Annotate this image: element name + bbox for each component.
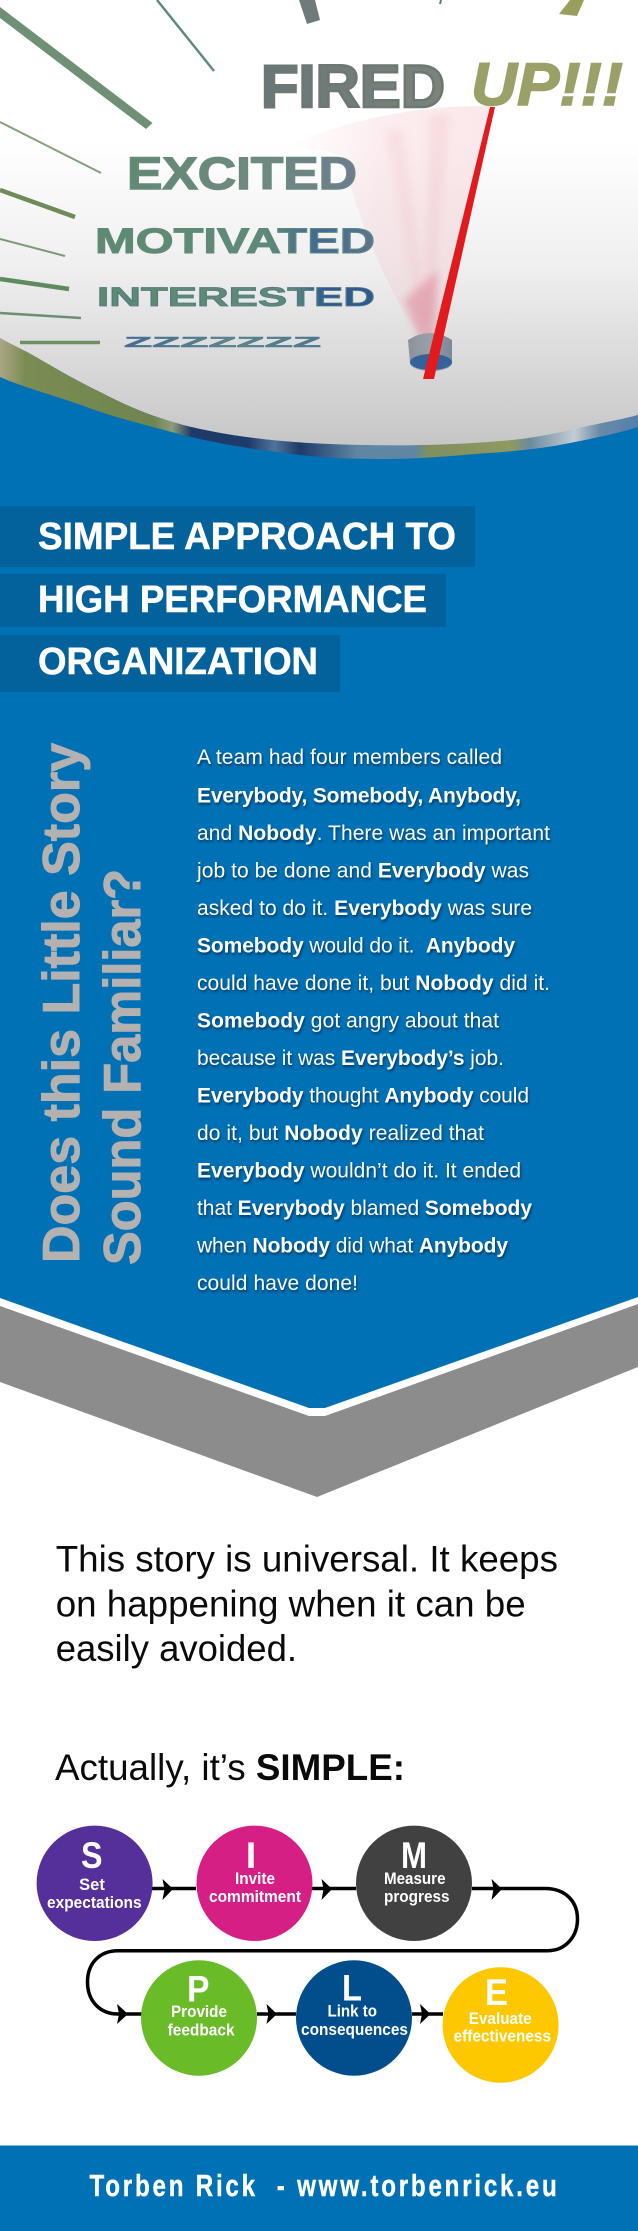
speedometer tick marks bbox=[0, 0, 584, 342]
intro text bbox=[56, 1539, 558, 1669]
simple process diagram bbox=[37, 1826, 578, 2083]
circle S: set expectations: expectations bbox=[47, 1894, 142, 1912]
circle E: evaluate effectiveness bbox=[443, 1967, 559, 2083]
story paragraph: Everybody, Somebody, Anybody, bbox=[197, 785, 521, 808]
story paragraph: could have done! bbox=[197, 1272, 358, 1295]
speedometer rim bbox=[0, 338, 638, 459]
title bar 1: SIMPLE APPROACH TO bbox=[38, 516, 456, 558]
title bar 3: ORGANIZATION bbox=[38, 641, 318, 683]
story paragraph: A team had four members called bbox=[197, 746, 502, 769]
label: fired up: FIRED bbox=[261, 53, 445, 120]
story paragraph: could have done it, but Nobody did it. bbox=[197, 972, 550, 995]
circle M: measure progress bbox=[356, 1826, 472, 1941]
circle P: provide feedback: feedback bbox=[168, 2022, 235, 2040]
story paragraph: Somebody would do it. Anybody bbox=[197, 935, 515, 958]
story paragraph: Everybody thought Anybody could bbox=[197, 1085, 529, 1108]
label: excited: EXCITED bbox=[127, 148, 357, 199]
circle S: set expectations bbox=[37, 1826, 153, 1941]
intro text: on happening when it can be bbox=[56, 1584, 526, 1625]
title bar 1 bbox=[0, 506, 475, 567]
story paragraph bbox=[196, 746, 550, 1295]
circle L: link to consequences: L bbox=[342, 1968, 362, 2009]
rotated heading: Sound Familiar? bbox=[94, 869, 152, 1265]
story paragraph: asked to do it. Everybody was sure bbox=[197, 897, 532, 920]
title bar 3 bbox=[0, 635, 340, 692]
story paragraph: because it was Everybody’s job. bbox=[197, 1047, 504, 1070]
circle P: provide feedback: P bbox=[187, 1969, 210, 2010]
heading: actually it's simple: Actually, it’s SIMPLE: bbox=[55, 1747, 405, 1788]
story paragraph: and Nobody. There was an important bbox=[197, 822, 550, 845]
rotated heading: Does this Little Story bbox=[33, 743, 91, 1263]
circle P: provide feedback: Provide bbox=[171, 2003, 227, 2021]
needle hub bbox=[408, 333, 452, 371]
grey chevron bbox=[0, 1304, 638, 1497]
connector line bbox=[88, 1888, 578, 2014]
story paragraph: job to be done and Everybody was bbox=[196, 860, 529, 883]
speedometer dial face bbox=[0, 0, 638, 447]
rotated heading bbox=[33, 743, 152, 1265]
title bar 2: HIGH PERFORMANCE bbox=[38, 579, 427, 621]
circle I: invite commitment: I bbox=[246, 1835, 256, 1876]
circle P: provide feedback bbox=[141, 1960, 257, 2076]
story paragraph: Everybody wouldn’t do it. It ended bbox=[197, 1160, 521, 1183]
circle I: invite commitment: commitment bbox=[209, 1888, 301, 1906]
circle M: measure progress: Measure bbox=[384, 1870, 446, 1888]
label: interested: INTERESTED bbox=[97, 282, 375, 312]
circle S: set expectations: Set bbox=[79, 1876, 105, 1894]
red needle bbox=[423, 107, 495, 379]
story paragraph: that Everybody blamed Somebody bbox=[197, 1197, 532, 1220]
title block bbox=[0, 506, 475, 692]
panel: blue story banner bbox=[0, 300, 638, 1408]
label: fired up: UP!!! bbox=[471, 51, 623, 118]
story paragraph: Somebody got angry about that bbox=[197, 1010, 499, 1033]
arrowheads bbox=[117, 1879, 502, 2024]
circle L: link to consequences: Link to bbox=[328, 2003, 377, 2021]
intro text: This story is universal. It keeps bbox=[56, 1539, 558, 1580]
circle S: set expectations: S bbox=[81, 1835, 102, 1876]
circle M: measure progress: progress bbox=[384, 1888, 450, 1906]
circle L: link to consequences bbox=[296, 1960, 412, 2076]
story paragraph: when Nobody did what Anybody bbox=[196, 1235, 508, 1258]
circle E: evaluate effectiveness: E bbox=[485, 1972, 508, 2013]
label: motivated: MOTIVATED bbox=[95, 222, 375, 261]
circle E: evaluate effectiveness: Evaluate bbox=[469, 2010, 532, 2028]
footer bbox=[0, 2146, 638, 2231]
story paragraph: do it, but Nobody realized that bbox=[197, 1122, 484, 1145]
circle M: measure progress: M bbox=[401, 1835, 427, 1876]
label: fired up bbox=[261, 51, 623, 120]
panel: speedometer photo bbox=[0, 0, 638, 459]
footer: Torben Rick - www.torbenrick.eu bbox=[90, 2168, 557, 2203]
circle I: invite commitment bbox=[196, 1826, 312, 1941]
needle motion blur wedge bbox=[285, 106, 492, 345]
circle L: link to consequences: consequences bbox=[301, 2021, 408, 2039]
circle E: evaluate effectiveness: effectiveness bbox=[454, 2028, 551, 2046]
intro text: easily avoided. bbox=[56, 1628, 297, 1669]
circle I: invite commitment: Invite bbox=[235, 1870, 275, 1888]
label: zzzzzzz: ZZZZZZZ bbox=[124, 335, 321, 351]
